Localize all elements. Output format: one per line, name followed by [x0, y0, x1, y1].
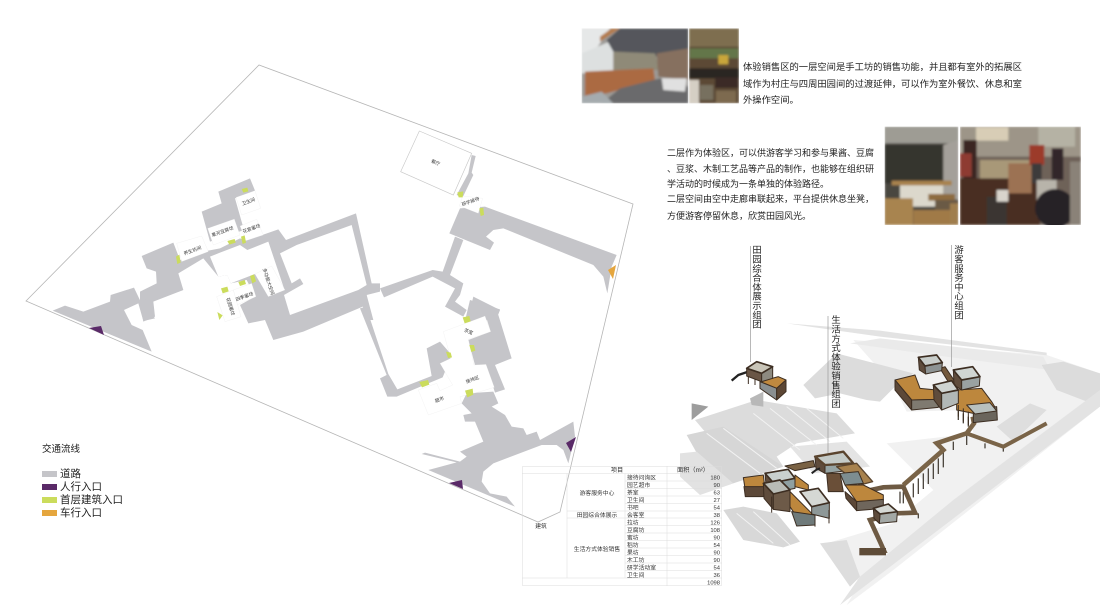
building labels: 多功能大空间	[261, 267, 276, 296]
legend item: pedestrian: 人行入口	[60, 481, 102, 493]
paragraph: second floor: 二层空间由空中走廊串联起来，平台提供休息坐凳，	[667, 194, 874, 204]
paragraph: second floor: 学活动的时候成为一条单独的体验路径。	[667, 179, 829, 189]
table rows: areas: 90	[714, 558, 720, 564]
legend item: road: 道路	[60, 468, 81, 480]
photo: shop counter	[582, 28, 688, 103]
legend item: road	[42, 468, 81, 480]
entrances: pedestrian	[89, 326, 576, 489]
building labels: 接待区	[465, 374, 481, 385]
table rows: items	[627, 474, 656, 579]
building labels: 花园蜜坊	[224, 297, 237, 317]
table rows: areas: 126	[710, 520, 720, 526]
table rows: areas: 63	[714, 490, 720, 496]
table rows: items: 卫生间	[627, 496, 645, 504]
table rows: items: 蜜坊	[627, 534, 639, 542]
table header	[611, 466, 709, 474]
photo: workshop visitors	[960, 127, 1081, 228]
building: 生活方式体验销售组团	[743, 452, 897, 527]
table rows: items: 卫生间	[627, 571, 645, 579]
building labels: 养生坊间	[183, 244, 203, 257]
building labels: 超市	[434, 395, 445, 404]
building: 田园综合体展示组团	[732, 362, 786, 400]
legend title: 交通流线	[42, 444, 80, 455]
table rows: areas: 36	[714, 573, 720, 579]
paragraph: ground floor	[743, 62, 1022, 105]
table header: 面积（m²）	[677, 466, 709, 474]
table frame	[522, 466, 722, 586]
table rows: items: 稻坊	[627, 541, 639, 549]
photo: market stall	[689, 28, 739, 103]
table rows: items: 茶室	[627, 488, 639, 496]
paragraph: second floor: 二层作为体验区，可以供游客学习和参与果酱、豆腐	[667, 148, 874, 158]
table rows: areas: 54	[714, 566, 721, 572]
table rows: areas: 54	[714, 543, 721, 549]
table rows: areas: 108	[710, 528, 720, 534]
table group labels: 游客服务中心	[580, 489, 615, 497]
paragraph: ground floor: 域作为村庄与四周田园间的过渡延伸，可以作为室外餐饮、休息和室	[743, 79, 1022, 89]
table rows: items: 拉坊	[627, 518, 639, 526]
building labels: 茶室	[463, 327, 475, 336]
roads	[53, 155, 617, 507]
site boundary	[26, 65, 633, 522]
site ground	[680, 323, 1100, 605]
table group labels: 田园综合体展示	[577, 511, 617, 519]
leader lines	[750, 245, 952, 453]
legend item: building entrance: 首层建筑入口	[60, 494, 123, 506]
label: 游客服务中心组团: 游客服务中心组团	[953, 245, 963, 319]
building labels: 研学接待	[461, 195, 481, 208]
label: 田园综合体展示组团: 田园综合体展示组团	[751, 245, 761, 329]
table rows: areas: 27	[714, 498, 720, 504]
paragraph: ground floor: 外操作空间。	[743, 95, 799, 105]
table header: 项目	[611, 467, 623, 474]
table rows: areas: 90	[714, 550, 720, 556]
building labels: 卫生间	[241, 196, 257, 207]
walkway	[859, 410, 1047, 555]
photo pair: ground floor	[582, 28, 1081, 225]
table group labels: 建筑	[535, 522, 547, 530]
table group labels	[535, 489, 620, 553]
table rows: areas: 90	[714, 483, 720, 489]
table rows: areas: 1098	[707, 580, 720, 586]
entrances: building	[176, 188, 484, 397]
building labels: 花意蜜坊	[242, 222, 262, 235]
table rows: areas: 180	[710, 476, 720, 482]
entrance: vehicle	[608, 265, 616, 279]
table rows: items: 木工坊	[627, 556, 645, 564]
building labels	[183, 158, 481, 404]
legend	[42, 444, 123, 519]
legend item: vehicle: 车行入口	[60, 507, 102, 519]
paragraph: second floor: 方便游客停留休息，欣赏田园风光。	[667, 211, 811, 221]
table rows: items: 园艺超市	[627, 481, 650, 489]
paragraph: second floor	[667, 148, 874, 221]
table rows: areas: 38	[714, 513, 720, 519]
table rows: items: 书吧	[627, 504, 639, 512]
paragraph: second floor: 、豆浆、木制工艺品等产品的制作，也能够在组织研	[667, 164, 874, 174]
table rows: areas: 54	[714, 506, 721, 512]
table rows: items: 研学活动室	[627, 564, 656, 572]
table rows: areas: 90	[714, 536, 720, 542]
paragraph: ground floor: 体验销售区的一层空间是手工坊的销售功能，并且都有室外的拓展区	[743, 62, 1022, 72]
building labels: 四季蜜坊	[235, 290, 255, 303]
building labels: 果河豆腐坊	[210, 224, 235, 239]
table rows: areas	[707, 476, 721, 586]
building: 游客服务中心组团	[895, 355, 997, 425]
building labels: 餐厅	[430, 158, 442, 168]
table rows: items: 接待问询区	[627, 474, 656, 482]
table rows: items: 会客室	[627, 511, 645, 519]
buildings	[177, 131, 494, 415]
photo: cafe seating	[885, 127, 958, 225]
table group labels: 生活方式体验销售	[574, 545, 620, 553]
table rows: items: 豆腐坊	[627, 526, 645, 534]
table rows: items: 果坊	[627, 548, 639, 556]
label: 生活方式体验销售组团: 生活方式体验销售组团	[830, 315, 840, 408]
